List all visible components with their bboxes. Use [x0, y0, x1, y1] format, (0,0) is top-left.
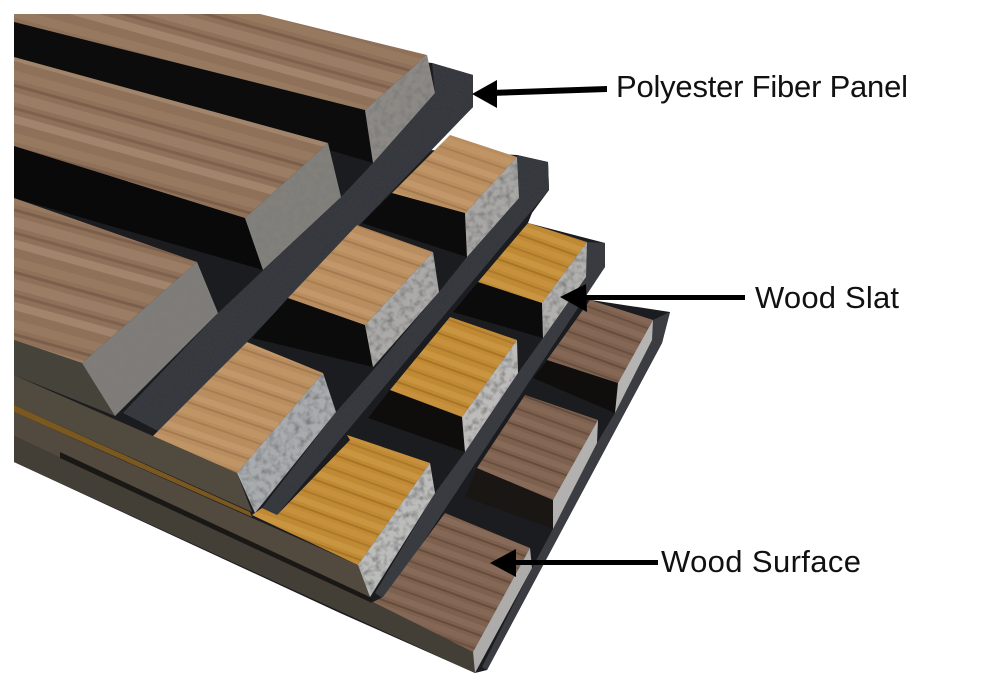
- side: [14, 146, 263, 270]
- end: [365, 55, 435, 163]
- lower edge dark strip: [14, 436, 475, 673]
- wood surface: [478, 223, 587, 303]
- slat row 3: amber G: [453, 223, 587, 338]
- slat row 3: amber I: [252, 435, 435, 597]
- end: [462, 340, 518, 452]
- side: [453, 282, 543, 338]
- slat row 2: oak E: [252, 225, 439, 367]
- slat row 1: walnut B: [14, 57, 341, 270]
- side: [14, 22, 373, 163]
- side: [533, 360, 618, 413]
- callout: wood surface: [490, 544, 861, 579]
- slat row 1: walnut C: [14, 198, 218, 416]
- wood surface: [288, 225, 433, 325]
- side: [465, 468, 553, 529]
- wood surface: [14, 198, 197, 363]
- groove: [60, 452, 372, 603]
- end: [82, 262, 218, 416]
- slat row 3: amber H: [368, 317, 518, 452]
- side: [14, 340, 115, 416]
- side: [14, 375, 252, 512]
- felt strip 3: [375, 242, 605, 600]
- slat row 4: walnut K: [465, 395, 598, 529]
- arrow: [560, 284, 745, 312]
- side: [252, 298, 373, 367]
- arrow: [472, 80, 607, 108]
- slat row 4: walnut L: [373, 513, 532, 673]
- wood surface: [477, 395, 598, 500]
- wood surface: [390, 317, 517, 417]
- bottom edge layers: [14, 405, 475, 673]
- arrow: [490, 549, 658, 577]
- slat row 1: top walnut A: [14, 14, 435, 163]
- wood surface: [547, 300, 653, 383]
- wood surface: [252, 435, 430, 565]
- end: [245, 143, 341, 270]
- end: [358, 463, 435, 597]
- label: Polyester Fiber Panel: [616, 69, 908, 104]
- side: [368, 390, 465, 452]
- wood surface: [14, 14, 427, 110]
- slat row 4: walnut J: [533, 300, 653, 413]
- label: Wood Surface: [661, 544, 861, 579]
- side: [362, 193, 467, 257]
- callout: polyester fiber panel: [472, 69, 908, 108]
- callout: wood slat: [560, 280, 899, 315]
- polyester fiber backing: [14, 14, 670, 673]
- felt strip 1: [123, 63, 473, 432]
- end: [473, 548, 532, 673]
- end: [553, 420, 598, 529]
- wood surface: [153, 342, 323, 473]
- end: [365, 252, 439, 367]
- felt strip 2: [262, 155, 549, 515]
- felt strip 4: [482, 312, 670, 670]
- amber line: [14, 405, 252, 517]
- panel stack photo: [14, 14, 670, 673]
- wood surface: [14, 57, 328, 218]
- slat row 2: oak F: [14, 342, 336, 513]
- wood surface: [392, 135, 517, 213]
- end: [542, 242, 587, 338]
- lower edge mid strip: [14, 412, 372, 602]
- wood surface: [373, 513, 530, 652]
- label: Wood Slat: [755, 280, 899, 315]
- slat row 2: oak D: [362, 135, 519, 257]
- end: [465, 157, 519, 257]
- end: [615, 320, 653, 413]
- end: [237, 373, 336, 513]
